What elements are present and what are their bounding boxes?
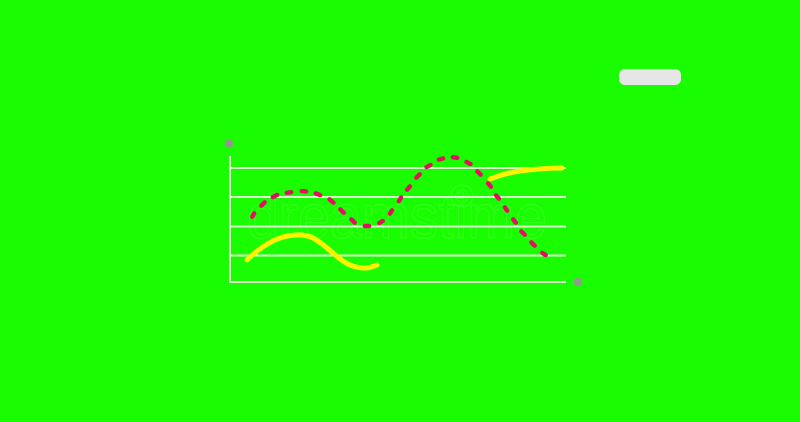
white pill	[619, 69, 681, 85]
yellow line: right segment	[490, 168, 562, 179]
chart axes and grid	[230, 156, 566, 283]
dashed red line	[252, 157, 546, 255]
axis end dot: top	[225, 139, 233, 148]
axis end dot: right	[574, 278, 582, 286]
watermark: dreamstime	[247, 183, 547, 252]
yellow line: left segment	[247, 235, 377, 268]
